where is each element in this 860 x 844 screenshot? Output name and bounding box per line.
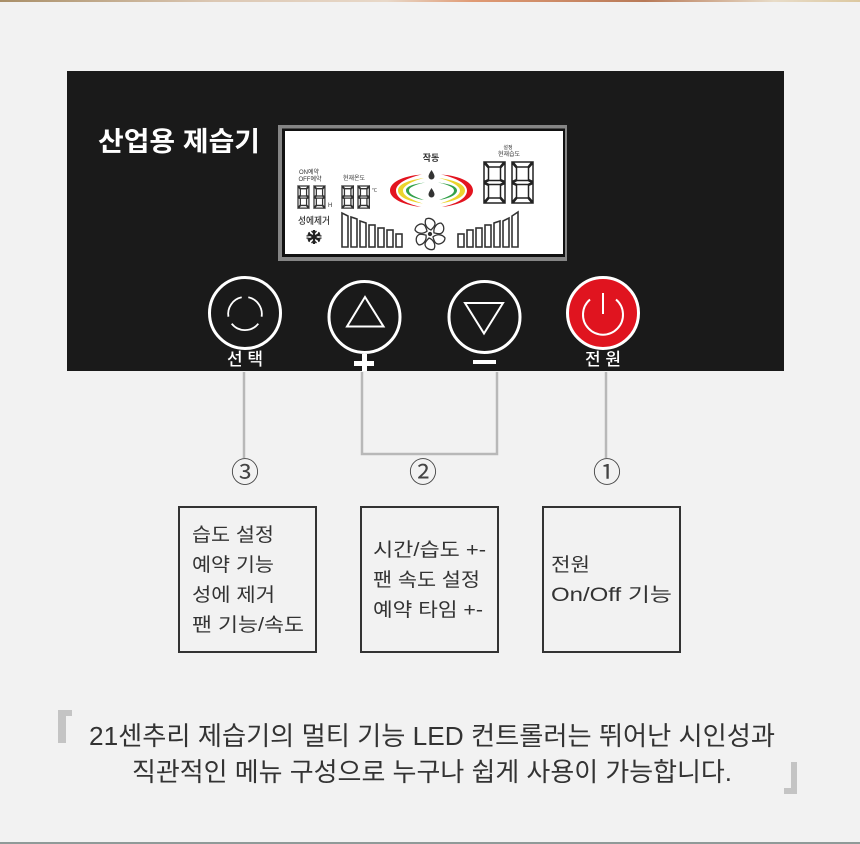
box: plus minus functions: 시간/습도 +-: [373, 539, 486, 561]
icon: plus: [354, 354, 374, 371]
humidity arcs: [390, 174, 473, 207]
icon: water drops: [428, 170, 434, 198]
button: up: [329, 282, 400, 352]
box: plus minus functions: 팬 속도 설정: [373, 569, 480, 591]
box: plus minus functions: 예약 타임 +-: [373, 599, 483, 621]
icon: minus: [473, 360, 496, 364]
celsius unit: ℃: [372, 188, 377, 194]
box: select functions: 팬 기능/속도: [192, 614, 304, 636]
closing statement: 직관적인 메뉴 구성으로 누구나 쉽게 사용이 가능합니다.: [132, 757, 732, 787]
panel: controller body: [67, 71, 784, 371]
box: select functions: 성에 제거: [192, 584, 275, 606]
set humidity label: [498, 144, 521, 158]
frost removal label: 성에제거: [298, 216, 330, 227]
reservation labels: OFF예약: [298, 175, 322, 183]
connector: power to 1: [605, 372, 607, 458]
quote mark: open: [58, 710, 72, 743]
button: power: [568, 278, 638, 348]
LCD display: [278, 125, 567, 261]
box: select functions: 습도 설정: [192, 524, 274, 546]
set humidity digits: [484, 162, 533, 203]
reservation time digits: [298, 186, 325, 208]
set humidity label: 현재습도: [498, 150, 521, 158]
temperature digits: [342, 186, 369, 208]
set humidity label: 설정: [503, 144, 513, 151]
hour unit: H: [328, 203, 332, 209]
reservation labels: ON예약: [299, 168, 319, 176]
box: select functions: 예약 기능: [192, 554, 274, 576]
connector: select to 3: [243, 372, 245, 458]
button: down: [449, 282, 520, 352]
box: power functions: 전원: [551, 554, 590, 576]
quote mark: close: [784, 762, 797, 794]
number 1: ①: [593, 457, 621, 488]
label: operation: 작동: [423, 152, 439, 163]
number 3: ③: [231, 457, 259, 488]
icon: fan: [414, 218, 446, 250]
button: select: [210, 278, 280, 348]
box: plus minus functions: [361, 507, 498, 652]
title: 산업용 제습기: [98, 127, 260, 157]
reservation labels: [298, 168, 322, 183]
box: select functions: [179, 507, 316, 652]
bar gauge right: [458, 212, 518, 247]
bar gauge left: [342, 213, 402, 247]
label: power: 전 원: [585, 350, 621, 369]
number 2: ②: [409, 457, 437, 488]
connector: plus minus to 2: [362, 372, 497, 454]
closing statement: [89, 721, 775, 787]
closing statement: 21센추리 제습기의 멀티 기능 LED 컨트롤러는 뛰어난 시인성과: [89, 721, 775, 751]
icon: snowflake: [306, 230, 322, 244]
box: power functions: On/Off 기능: [551, 584, 672, 606]
temperature label: 현재온도: [343, 174, 366, 182]
box: power functions: [543, 507, 680, 652]
label: select: 선 택: [227, 350, 263, 369]
